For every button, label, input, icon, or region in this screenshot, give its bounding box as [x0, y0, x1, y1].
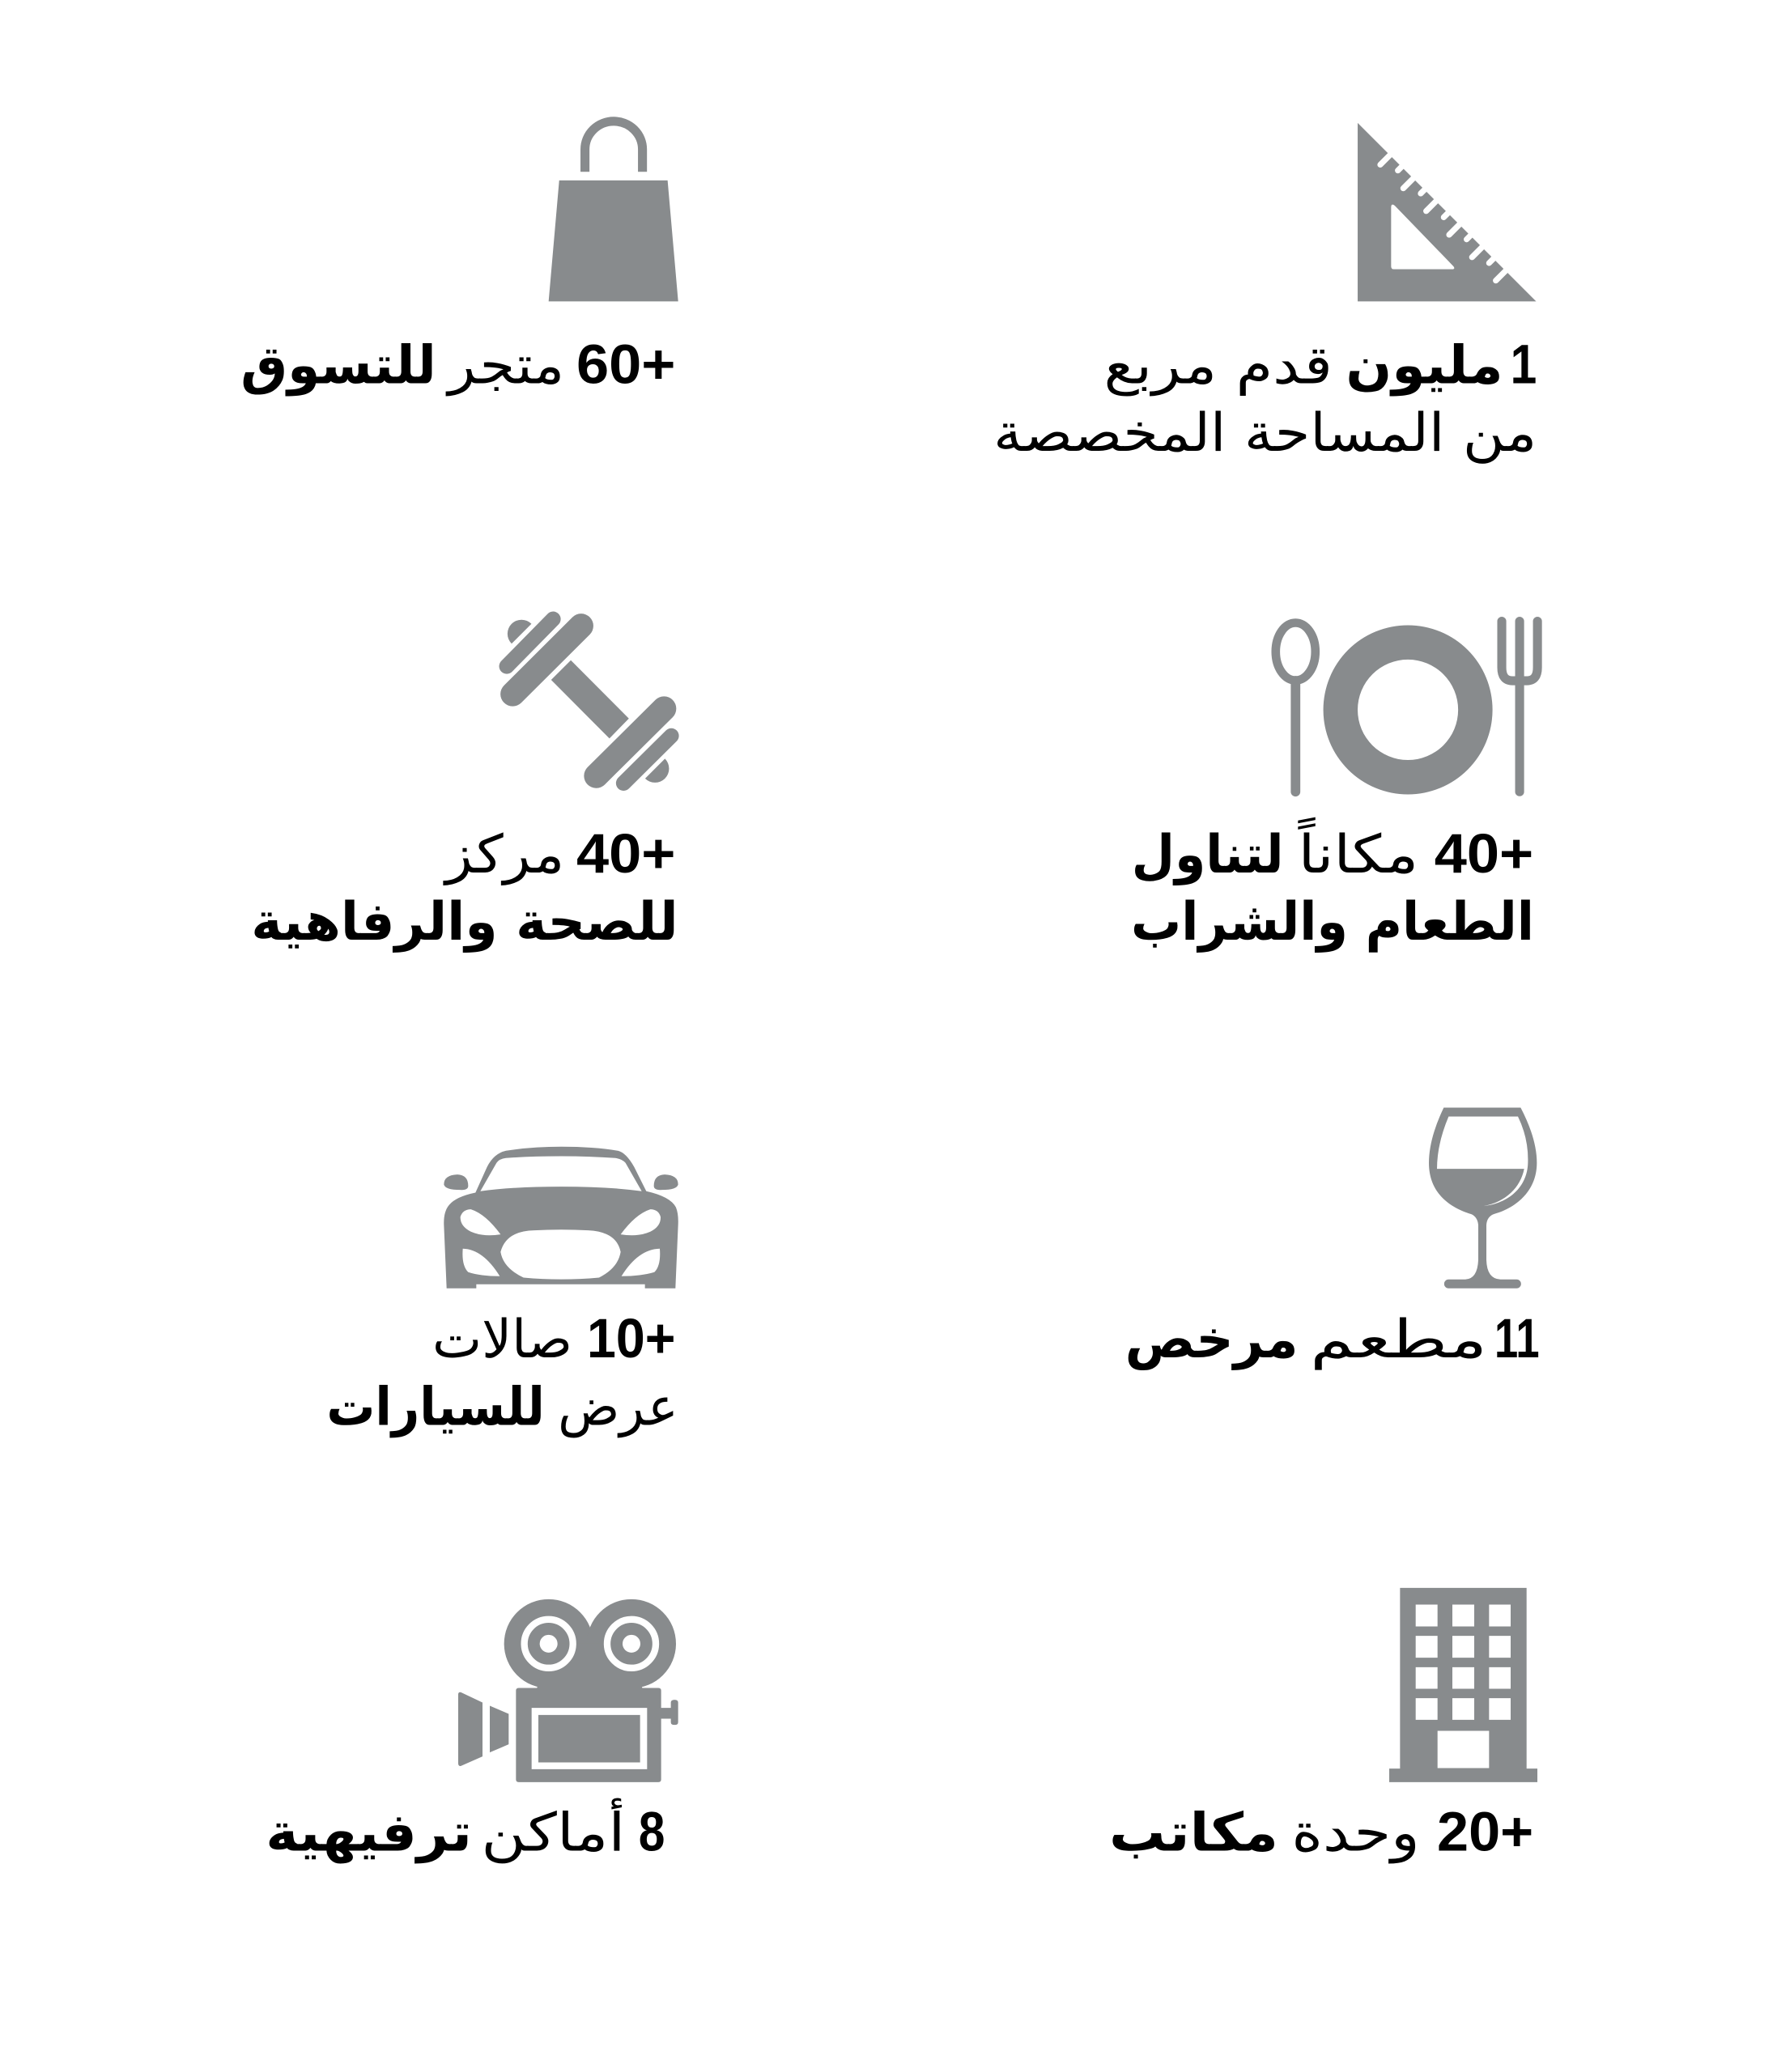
- icon: wine glass: [1429, 1107, 1537, 1289]
- text: 40+ places to eat and drink: [1132, 817, 1533, 886]
- text: 40+ centres: مركز: [443, 824, 564, 885]
- text: 40+ places to eat and drink: لتناول: [1132, 824, 1284, 886]
- text: 20+ office units: وحدة: [1291, 1802, 1420, 1863]
- text: 1 million square feet: 1: [1511, 333, 1537, 396]
- text: food and drink: الطعام والشراب: [1131, 891, 1534, 953]
- text: 1 million square feet: [1104, 333, 1537, 397]
- text: 10+ halls: صالات: [432, 1309, 572, 1370]
- text: 60+ stores for shopping: متجر: [445, 335, 564, 397]
- text: 1 million square feet: قدم مربع: [1104, 335, 1333, 397]
- icon: dumbbell: [507, 619, 671, 783]
- text: 20+ office units: [1109, 1800, 1533, 1863]
- panel: office units: [1109, 1588, 1537, 1863]
- text: car display: للسيارات: [326, 1376, 545, 1437]
- icon: office building: [1389, 1588, 1537, 1782]
- panel: licensed restaurants: [1125, 1107, 1540, 1370]
- text: 8 entertainment venues: أماكن: [481, 1797, 625, 1863]
- icon: set square ruler: [1358, 123, 1536, 301]
- text: 11 licensed restaurants: 11: [1494, 1307, 1540, 1369]
- icon: shopping bag: [549, 121, 678, 301]
- text: 40+ centres: 40+: [576, 822, 675, 885]
- text: 11 licensed restaurants: مرخص: [1125, 1309, 1299, 1370]
- text: 40+ places to eat and drink: مكاناً: [1298, 817, 1418, 885]
- text: 40+ places to eat and drink: 40+: [1435, 822, 1533, 885]
- text: 60+ stores for shopping: 60+: [576, 333, 675, 396]
- text: car display: [326, 1376, 678, 1437]
- text: car display: عرض: [558, 1376, 678, 1437]
- panel: car showrooms: [326, 1147, 678, 1437]
- icon: film camera: [458, 1599, 678, 1782]
- text: 60+ stores for shopping: [240, 333, 675, 397]
- text: 1 million square feet: مليون: [1346, 335, 1503, 397]
- text: 20+ office units: مكاتب: [1109, 1802, 1278, 1863]
- icon: car front: [444, 1147, 678, 1289]
- panel: dining: [1131, 622, 1537, 953]
- text: 10+ halls: [432, 1307, 675, 1370]
- text: 10+ halls: 10+: [587, 1307, 675, 1369]
- panel: health and wellness: [251, 619, 678, 953]
- text: 40+ centres: [443, 822, 675, 885]
- text: 60+ stores for shopping: للتسوق: [240, 335, 436, 397]
- icon: spoon plate and fork: [1276, 622, 1537, 794]
- text: 8 entertainment venues: 8: [639, 1800, 665, 1862]
- panel: total area: [993, 123, 1537, 464]
- text: 20+ office units: 20+: [1437, 1800, 1533, 1862]
- text: 8 entertainment venues: ترفيهية: [266, 1802, 472, 1863]
- text: of allocated space: من المساحة المخصصة: [993, 402, 1537, 464]
- text: 11 licensed restaurants: مطعم: [1310, 1309, 1487, 1370]
- panel: entertainment venues: [266, 1599, 678, 1863]
- panel: shops: [240, 121, 678, 397]
- text: 8 entertainment venues: [266, 1797, 665, 1863]
- text: 11 licensed restaurants: [1125, 1307, 1540, 1370]
- text: health and wellness: للصحة والرفاهية: [251, 891, 678, 953]
